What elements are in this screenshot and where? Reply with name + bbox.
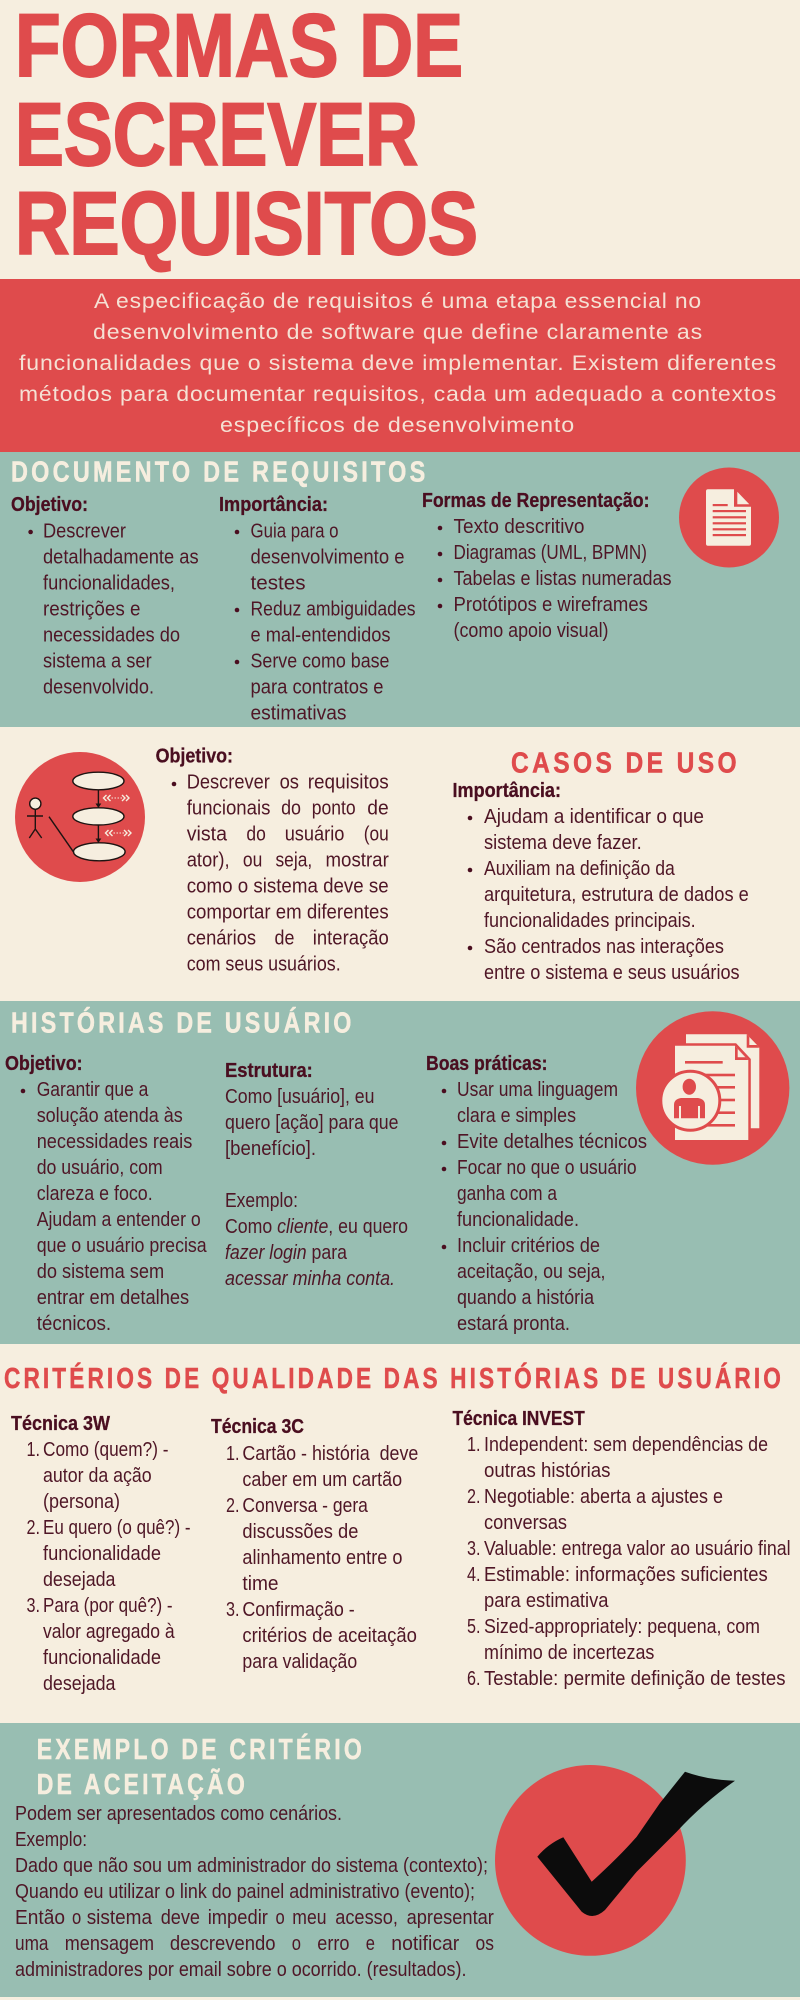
column: estrutura: fazer login para bbox=[225, 1242, 348, 1264]
column: formas de representação: Protótipos e wireframes bbox=[454, 594, 648, 616]
column: técnica INVEST: 3. bbox=[467, 1538, 480, 1560]
panel: introduction: desenvolvimento de software que define claramente as bbox=[93, 320, 703, 344]
heading: histórias de usuário: HISTÓRIAS DE USUÁRIO bbox=[11, 1006, 355, 1040]
column: objetivo: desenvolvido. bbox=[43, 676, 154, 698]
panel: exemplo de critério de aceitação bbox=[0, 1723, 800, 1997]
column: objetivo: interação bbox=[313, 928, 389, 950]
column: técnica 3C: Cartão - história deve bbox=[242, 1443, 418, 1465]
column: objetivo: clareza e foco. bbox=[37, 1183, 153, 1205]
column: técnica 3W: 2. bbox=[26, 1517, 40, 1539]
column: técnica 3W: 1. bbox=[26, 1439, 40, 1461]
column: boas práticas: ganha com a bbox=[457, 1183, 558, 1205]
column: importância bbox=[452, 779, 749, 984]
column: objetivo: ponto bbox=[312, 798, 356, 820]
text block: example scenario: Quando eu utilizar o link do painel administrativo (evento); bbox=[15, 1881, 475, 1903]
column: importância: arquitetura, estrutura de dados e bbox=[484, 884, 749, 906]
column: importância: Guia para o bbox=[250, 520, 338, 542]
text block: example scenario: os bbox=[476, 1933, 494, 1955]
column: técnica 3C: Confirmação - bbox=[242, 1599, 355, 1621]
column: formas de representação bbox=[422, 489, 672, 642]
column: técnica 3W: Técnica 3W bbox=[11, 1412, 111, 1435]
column: objetivo: ator), bbox=[187, 850, 230, 872]
column: técnica 3C: caber em um cartão bbox=[242, 1469, 402, 1491]
column: objetivo: necessidades do bbox=[43, 624, 180, 646]
column: objetivo: técnicos. bbox=[37, 1313, 111, 1335]
panel: documento de requisitos bbox=[0, 452, 800, 727]
column: objetivo: necessidades reais bbox=[37, 1131, 192, 1153]
column: técnica 3C: Técnica 3C bbox=[211, 1415, 304, 1438]
text block: example scenario: impedir bbox=[208, 1907, 268, 1929]
column: técnica INVEST bbox=[452, 1407, 791, 1690]
column: objetivo: cenários bbox=[187, 928, 256, 950]
text block: example scenario: apresentar bbox=[407, 1907, 494, 1929]
column: objetivo: do usuário, com bbox=[37, 1157, 163, 1179]
title: ESCREVER bbox=[15, 84, 418, 184]
column: formas de representação: (como apoio visual) bbox=[454, 620, 608, 642]
column: importância: estimativas bbox=[250, 702, 346, 724]
column: objetivo bbox=[156, 744, 389, 976]
column: boas práticas: estará pronta. bbox=[457, 1313, 570, 1335]
column: técnica 3C: critérios de aceitação bbox=[242, 1625, 417, 1647]
column: estrutura: Como [usuário], eu bbox=[225, 1086, 374, 1108]
column: técnica 3C: 2. bbox=[226, 1495, 240, 1517]
heading: exemplo de critério de aceitação: EXEMPLO DE CRITÉRIO bbox=[37, 1732, 365, 1766]
column: objetivo: Garantir que a bbox=[37, 1079, 149, 1101]
column: objetivo: do bbox=[281, 798, 301, 820]
column: objetivo: com seus usuários. bbox=[187, 954, 341, 976]
column: estrutura: [benefício]. bbox=[225, 1138, 316, 1160]
column: técnica INVEST: 1. bbox=[467, 1434, 480, 1456]
column: objetivo: requisitos bbox=[308, 772, 389, 794]
column: boas práticas: funcionalidade. bbox=[457, 1209, 579, 1231]
column: objetivo: mostrar bbox=[326, 850, 389, 872]
column: objetivo: os bbox=[280, 772, 299, 794]
column: técnica 3W: valor agregado à bbox=[43, 1621, 175, 1643]
text block: example scenario: erro bbox=[317, 1933, 350, 1955]
column: objetivo: seja, bbox=[276, 850, 312, 872]
text block: example scenario: descrevendo bbox=[170, 1933, 276, 1955]
column: importância: Reduz ambiguidades bbox=[250, 598, 416, 620]
column: objetivo: solução atenda às bbox=[37, 1105, 183, 1127]
column: importância: São centrados nas interações bbox=[484, 936, 724, 958]
title bbox=[15, 0, 478, 273]
column: técnica INVEST: 6. bbox=[467, 1668, 480, 1690]
column: objetivo: como o sistema deve se bbox=[187, 876, 389, 898]
column: técnica 3C: para validação bbox=[242, 1651, 357, 1673]
column: objetivo: funcionalidades, bbox=[43, 572, 175, 594]
text block: example scenario: mensagem bbox=[65, 1933, 154, 1955]
column: técnica 3C: alinhamento entre o bbox=[242, 1547, 402, 1569]
column: objetivo: comportar em diferentes bbox=[187, 902, 389, 924]
column: objetivo: Descrever bbox=[187, 772, 270, 794]
column: técnica 3C: 1. bbox=[226, 1443, 240, 1465]
heading: exemplo de critério de aceitação bbox=[37, 1732, 365, 1801]
column: formas de representação: Texto descritivo bbox=[454, 516, 584, 538]
column: formas de representação: Diagramas (UML, BPMN) bbox=[454, 542, 647, 564]
column: objetivo: que o usuário precisa bbox=[37, 1235, 207, 1257]
column: objetivo: (ou bbox=[364, 824, 389, 846]
text block: example scenario: o bbox=[276, 1907, 285, 1929]
column: objetivo bbox=[5, 1052, 207, 1335]
column: técnica 3W: funcionalidade bbox=[43, 1543, 161, 1565]
column: formas de representação: Tabelas e listas numeradas bbox=[454, 568, 672, 590]
column: técnica 3W bbox=[11, 1412, 190, 1695]
column: importância: e mal-entendidos bbox=[250, 624, 390, 646]
column: objetivo: ou bbox=[243, 850, 262, 872]
column: objetivo: de bbox=[274, 928, 294, 950]
column: objetivo: usuário bbox=[285, 824, 344, 846]
column: formas de representação: Formas de Representação: bbox=[422, 489, 650, 512]
column: objetivo: de bbox=[367, 798, 389, 820]
text block: example scenario: administradores por email sobre o ocorrido. (resultados). bbox=[15, 1959, 466, 1981]
column: objetivo: funcionais bbox=[187, 798, 270, 820]
column: técnica INVEST: Testable: permite definição de testes bbox=[484, 1668, 786, 1690]
column: objetivo: Ajudam a entender o bbox=[37, 1209, 201, 1231]
text block: example scenario bbox=[15, 1803, 494, 1981]
column: técnica 3W: Para (por quê?) - bbox=[43, 1595, 173, 1617]
column: técnica 3W: desejada bbox=[43, 1569, 116, 1591]
column: técnica 3C bbox=[211, 1415, 418, 1673]
column: técnica 3C: Conversa - gera bbox=[242, 1495, 369, 1517]
icon: documents with user bbox=[636, 1011, 789, 1165]
column: objetivo: vista bbox=[187, 824, 228, 846]
panel: critérios de qualidade bbox=[0, 1344, 800, 1723]
icon: use case diagram bbox=[15, 752, 145, 882]
panel: histórias de usuário bbox=[0, 1001, 800, 1344]
column: técnica INVEST: para estimativa bbox=[484, 1590, 609, 1612]
text block: example scenario: meu bbox=[292, 1907, 326, 1929]
column: importância: sistema deve fazer. bbox=[484, 832, 642, 854]
column: importância: Importância: bbox=[219, 493, 328, 516]
column: importância: para contratos e bbox=[250, 676, 384, 698]
column: técnica INVEST: conversas bbox=[484, 1512, 567, 1534]
column: técnica 3W: desejada bbox=[43, 1673, 116, 1695]
column: estrutura: Exemplo: bbox=[225, 1190, 298, 1212]
text block: example scenario: Exemplo: bbox=[15, 1829, 87, 1851]
column: boas práticas: Boas práticas: bbox=[426, 1052, 548, 1075]
column: técnica 3W: Eu quero (o quê?) - bbox=[43, 1517, 190, 1539]
column: estrutura: acessar minha conta. bbox=[225, 1268, 395, 1290]
panel: introduction: A especificação de requisitos é uma etapa essencial no bbox=[94, 289, 702, 313]
column: objetivo: Objetivo: bbox=[11, 493, 88, 516]
column: estrutura: Como cliente, eu quero bbox=[225, 1216, 408, 1238]
column: importância: Importância: bbox=[452, 779, 561, 802]
column: técnica 3W: autor da ação bbox=[43, 1465, 152, 1487]
column: objetivo: Objetivo: bbox=[5, 1052, 83, 1075]
column: objetivo: do sistema sem bbox=[37, 1261, 164, 1283]
column: técnica INVEST: Sized-appropriately: pequena, com bbox=[484, 1616, 760, 1638]
panel: introduction: métodos para documentar requisitos, cada um adequado a contextos bbox=[19, 382, 777, 406]
column: importância: Auxiliam na definição da bbox=[484, 858, 676, 880]
icon: document bbox=[679, 468, 779, 568]
panel: introduction: específicos de desenvolvimento bbox=[220, 413, 575, 437]
text block: example scenario: sistema bbox=[87, 1907, 153, 1929]
column: técnica 3C: time bbox=[242, 1573, 279, 1595]
column: objetivo: entrar em detalhes bbox=[37, 1287, 189, 1309]
column: importância: funcionalidades principais. bbox=[484, 910, 696, 932]
panel: introduction bbox=[0, 279, 800, 452]
column: objetivo: sistema a ser bbox=[43, 650, 152, 672]
column: objetivo: do bbox=[246, 824, 266, 846]
text block: example scenario: Então bbox=[15, 1907, 65, 1929]
column: estrutura: Estrutura: bbox=[225, 1059, 313, 1082]
panel: casos de uso bbox=[0, 727, 800, 1001]
column: importância bbox=[219, 493, 416, 724]
column: boas práticas: Focar no que o usuário bbox=[457, 1157, 637, 1179]
column: boas práticas: Evite detalhes técnicos bbox=[457, 1131, 647, 1153]
column: técnica INVEST: outras histórias bbox=[484, 1460, 610, 1482]
column: técnica 3W: 3. bbox=[26, 1595, 40, 1617]
column: boas práticas: Usar uma linguagem bbox=[457, 1079, 618, 1101]
column: técnica INVEST: Técnica INVEST bbox=[452, 1407, 585, 1430]
text block: example scenario: o bbox=[292, 1933, 301, 1955]
column: importância: Ajudam a identificar o que bbox=[484, 806, 704, 828]
column: técnica INVEST: 5. bbox=[467, 1616, 480, 1638]
text block: example scenario: Dado que não sou um administrador do sistema (contexto); bbox=[15, 1855, 488, 1877]
text block: example scenario: acesso, bbox=[335, 1907, 398, 1929]
column: objetivo: Descrever bbox=[43, 520, 126, 542]
column: técnica INVEST: Estimable: informações suficientes bbox=[484, 1564, 768, 1586]
column: técnica 3W: funcionalidade bbox=[43, 1647, 161, 1669]
column: boas práticas: aceitação, ou seja, bbox=[457, 1261, 606, 1283]
text block: example scenario: notificar bbox=[391, 1933, 460, 1955]
panel: introduction: funcionalidades que o sistema deve implementar. Existem diferentes bbox=[19, 351, 777, 375]
heading: casos de uso: CASOS DE USO bbox=[511, 748, 740, 780]
column: objetivo: restrições e bbox=[43, 598, 140, 620]
column: técnica 3W: Como (quem?) - bbox=[43, 1439, 168, 1461]
column: boas práticas: clara e simples bbox=[457, 1105, 576, 1127]
column: técnica INVEST: Independent: sem dependências de bbox=[484, 1434, 768, 1456]
column: técnica INVEST: 2. bbox=[467, 1486, 480, 1508]
column: estrutura: quero [ação] para que bbox=[225, 1112, 398, 1134]
column: técnica 3W: (persona) bbox=[43, 1491, 120, 1513]
column: técnica INVEST: 4. bbox=[467, 1564, 480, 1586]
column: importância: Serve como base bbox=[250, 650, 390, 672]
title: REQUISITOS bbox=[15, 173, 478, 273]
column: técnica INVEST: mínimo de incertezas bbox=[484, 1642, 654, 1664]
column: objetivo: detalhadamente as bbox=[43, 546, 199, 568]
column: técnica INVEST: Negotiable: aberta a ajustes e bbox=[484, 1486, 723, 1508]
column: objetivo: Objetivo: bbox=[156, 744, 233, 768]
icon: check mark bbox=[495, 1765, 735, 1956]
column: boas práticas: quando a história bbox=[457, 1287, 595, 1309]
text block: example scenario: o bbox=[72, 1907, 81, 1929]
heading: exemplo de critério de aceitação: DE ACEITAÇÃO bbox=[37, 1767, 248, 1801]
text block: example scenario: uma bbox=[15, 1933, 49, 1955]
column: boas práticas bbox=[426, 1052, 647, 1335]
text block: example scenario: deve bbox=[161, 1907, 200, 1929]
text block: example scenario: Podem ser apresentados como cenários. bbox=[15, 1803, 342, 1825]
heading: documento de requisitos: DOCUMENTO DE REQUISITOS bbox=[11, 456, 428, 488]
column: técnica 3C: discussões de bbox=[242, 1521, 358, 1543]
column: técnica 3C: 3. bbox=[226, 1599, 240, 1621]
text block: example scenario: e bbox=[366, 1933, 375, 1955]
column: importância: entre o sistema e seus usuários bbox=[484, 962, 740, 984]
column: importância: testes bbox=[250, 572, 306, 594]
column: importância: desenvolvimento e bbox=[250, 546, 404, 568]
column: boas práticas: Incluir critérios de bbox=[457, 1235, 600, 1257]
column: estrutura bbox=[225, 1059, 408, 1290]
column: objetivo bbox=[11, 493, 199, 698]
